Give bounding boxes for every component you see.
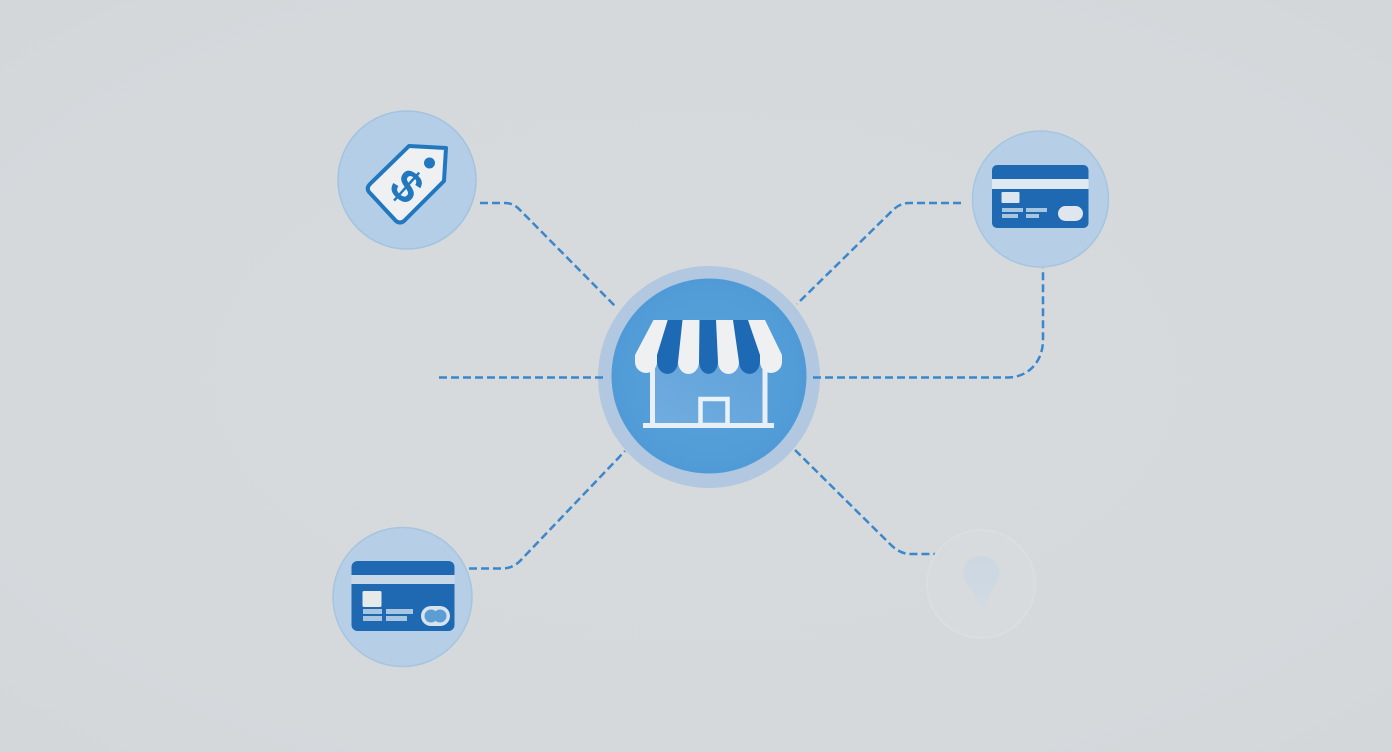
store door — [700, 399, 728, 425]
connector: bottom left — [469, 451, 625, 568]
satellite: credit card left — [333, 528, 472, 666]
connector: left — [439, 376, 606, 379]
store base line — [643, 423, 774, 428]
satellite disc — [338, 111, 476, 249]
icon: price tag — [368, 146, 446, 222]
central store hub — [598, 266, 820, 488]
faded disc — [927, 530, 1035, 638]
card stripe — [352, 575, 454, 584]
hub inner disc — [612, 278, 806, 474]
hub outer ring — [598, 266, 820, 488]
card logo circles — [424, 610, 438, 622]
card body — [992, 165, 1088, 228]
satellite disc — [972, 131, 1108, 267]
card stripe — [992, 179, 1088, 189]
card logo pill — [421, 606, 450, 626]
satellite: faded location pin — [927, 530, 1035, 638]
connector: right — [813, 268, 1043, 378]
card chip — [1002, 192, 1020, 203]
store posts — [652, 368, 765, 424]
dashed connectors — [439, 203, 1043, 568]
icon: faded pin — [963, 556, 999, 611]
icon: storefront — [635, 320, 782, 428]
card fine print — [363, 609, 413, 621]
card chip — [362, 591, 382, 607]
dollar sign: $ — [380, 158, 434, 214]
connector: top left — [480, 203, 615, 306]
satellite: credit card right — [972, 131, 1108, 267]
card logo pill — [1058, 206, 1083, 221]
awning white stripes — [635, 320, 782, 374]
satellite: price tag — [338, 111, 476, 249]
connector: top right — [797, 203, 961, 304]
tag hole — [424, 158, 435, 168]
awning — [635, 320, 782, 374]
awning blue stripes — [657, 320, 760, 374]
connector: bottom right — [795, 450, 935, 554]
card fine print — [1002, 208, 1047, 218]
satellite disc — [333, 528, 472, 666]
store wall — [653, 360, 765, 424]
card body — [352, 561, 454, 631]
